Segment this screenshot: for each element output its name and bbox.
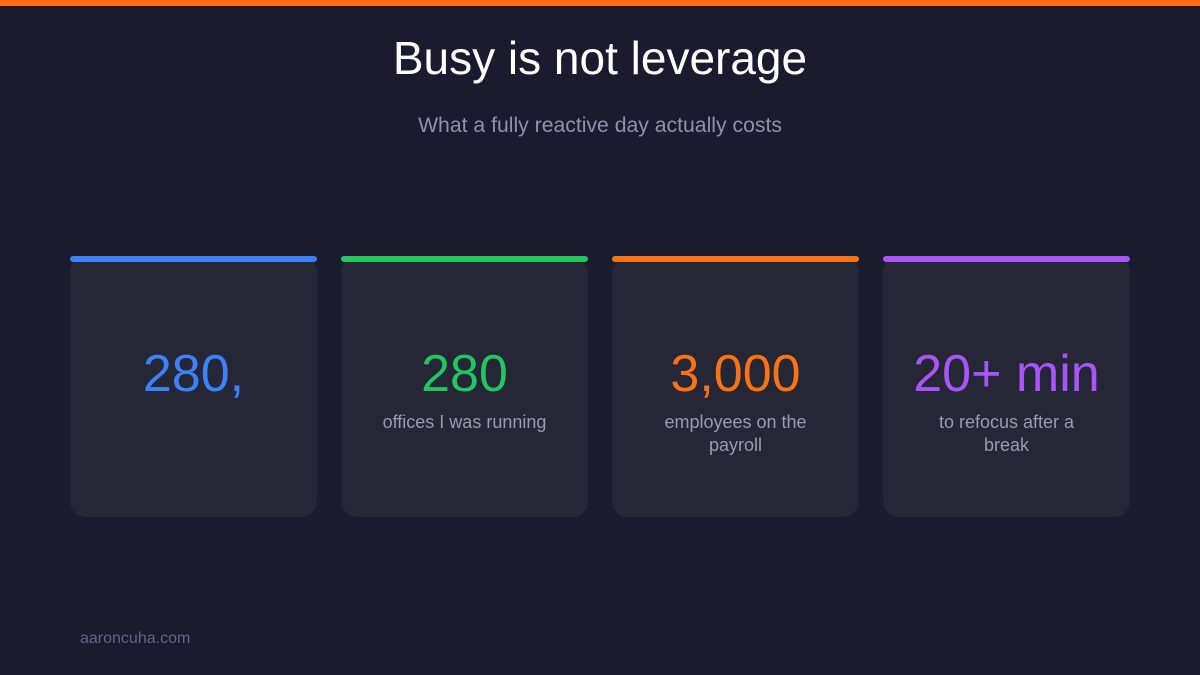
subtitle: What a fully reactive day actually costs: [418, 114, 782, 137]
stat label purple card: break: [984, 435, 1029, 455]
panel: stat card purple: [883, 256, 1130, 517]
panel: stat card green: [341, 256, 588, 517]
orange accent bar: [612, 256, 859, 262]
stat label green card: offices I was running: [383, 412, 546, 432]
stat label orange card: employees on the: [664, 412, 807, 432]
stat label purple card: to refocus after a: [939, 412, 1074, 432]
green accent bar: [341, 256, 588, 262]
blue accent bar: [70, 256, 317, 262]
footer credit: aaroncuha.com: [80, 630, 190, 647]
stat number green: 280: [421, 345, 508, 403]
stat number orange: 3,000: [670, 345, 801, 403]
purple accent bar: [883, 256, 1130, 262]
title: Busy is not leverage: [393, 32, 807, 84]
stat label orange card: [664, 412, 807, 455]
stat label orange card: payroll: [709, 435, 762, 455]
stat number blue: 280,: [143, 345, 244, 403]
panel: stat card orange: [612, 256, 859, 517]
stat number purple: 20+ min: [913, 345, 1100, 403]
top accent bar: [0, 0, 1200, 6]
panel: stat card blue: [70, 256, 317, 517]
stat label purple card: [939, 412, 1074, 455]
